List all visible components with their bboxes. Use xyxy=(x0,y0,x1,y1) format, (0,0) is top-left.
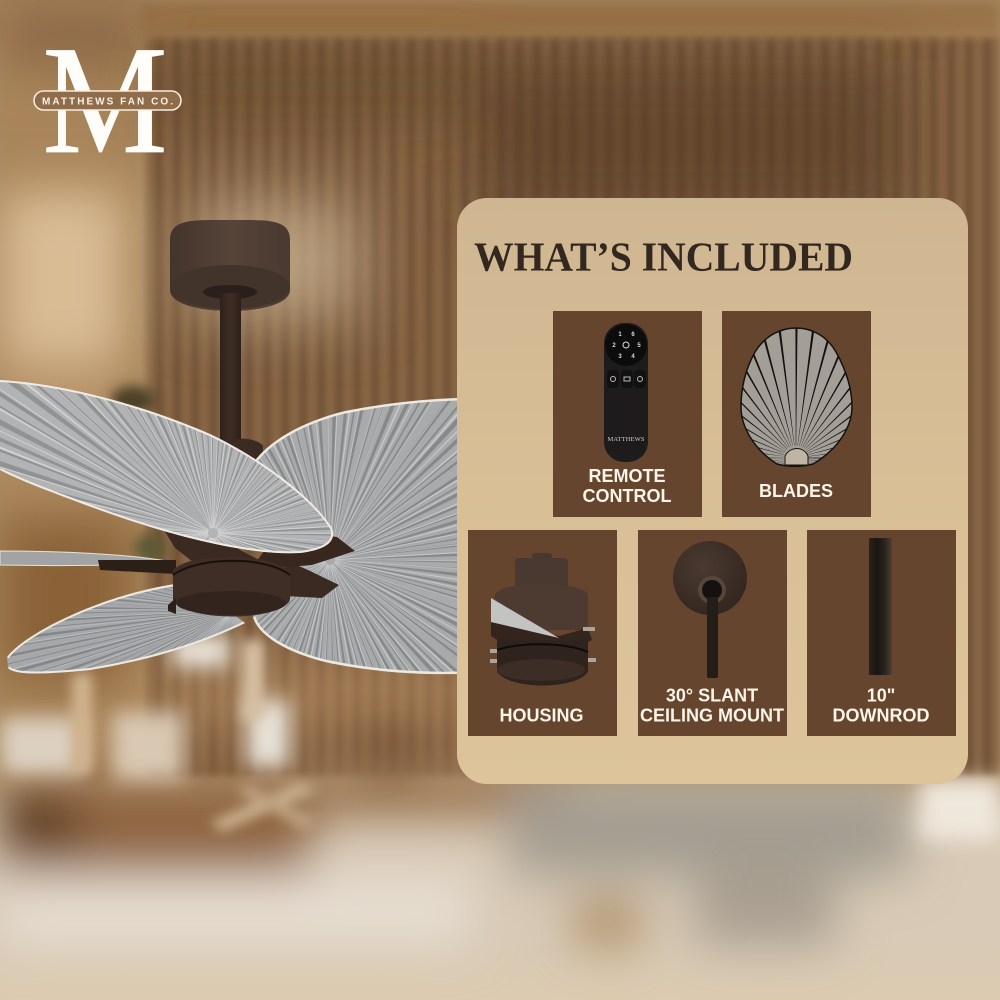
icon: remote: 4 xyxy=(631,354,635,360)
fan arm: left xyxy=(98,560,176,574)
label: BLADES xyxy=(759,481,833,501)
card: 30° slant ceiling mount xyxy=(638,530,787,736)
blade: lower left xyxy=(7,584,245,674)
icon: blade xyxy=(740,327,853,467)
blade: upper left xyxy=(0,380,334,554)
fan motor housing xyxy=(168,557,290,616)
fan arm: right upper xyxy=(250,530,355,570)
icon: downrod xyxy=(869,538,892,675)
fan arm: top xyxy=(158,520,288,575)
blade: thin left xyxy=(0,551,172,566)
label: 10" xyxy=(867,686,895,706)
icon: remote: 1 xyxy=(618,332,622,338)
logo: Matthews Fan Co.: MATTHEWS FAN CO. xyxy=(42,96,173,108)
card: 10 inch downrod xyxy=(807,530,956,736)
icon: remote: 5 xyxy=(637,343,641,349)
panel: what's included xyxy=(457,198,968,784)
icon: remote: 2 xyxy=(612,343,616,349)
fan downrod xyxy=(220,293,241,448)
card: blades xyxy=(722,311,871,517)
logo: Matthews Fan Co.: M xyxy=(42,14,168,186)
fan canopy xyxy=(170,220,290,311)
blade: right pair xyxy=(253,398,457,674)
ceiling fan xyxy=(0,220,470,735)
label: REMOTE xyxy=(588,466,666,486)
label: CEILING MOUNT xyxy=(640,706,784,726)
icon: housing xyxy=(490,553,596,686)
icon: remote xyxy=(604,323,648,462)
icon: remote: MATTHEWS xyxy=(608,436,645,443)
label: 30° SLANT xyxy=(666,686,758,706)
heading: WHAT’S INCLUDED xyxy=(474,234,853,280)
icon: remote: 6 xyxy=(631,332,635,338)
card: housing xyxy=(468,530,617,736)
icon: ceiling mount xyxy=(673,541,747,678)
label: DOWNROD xyxy=(832,706,930,726)
card: remote control xyxy=(553,311,702,517)
fan arm: right lower xyxy=(285,560,339,598)
fan coupler xyxy=(216,438,263,470)
label: CONTROL xyxy=(582,486,672,506)
label: HOUSING xyxy=(499,706,584,726)
icon: remote: 3 xyxy=(618,354,622,360)
